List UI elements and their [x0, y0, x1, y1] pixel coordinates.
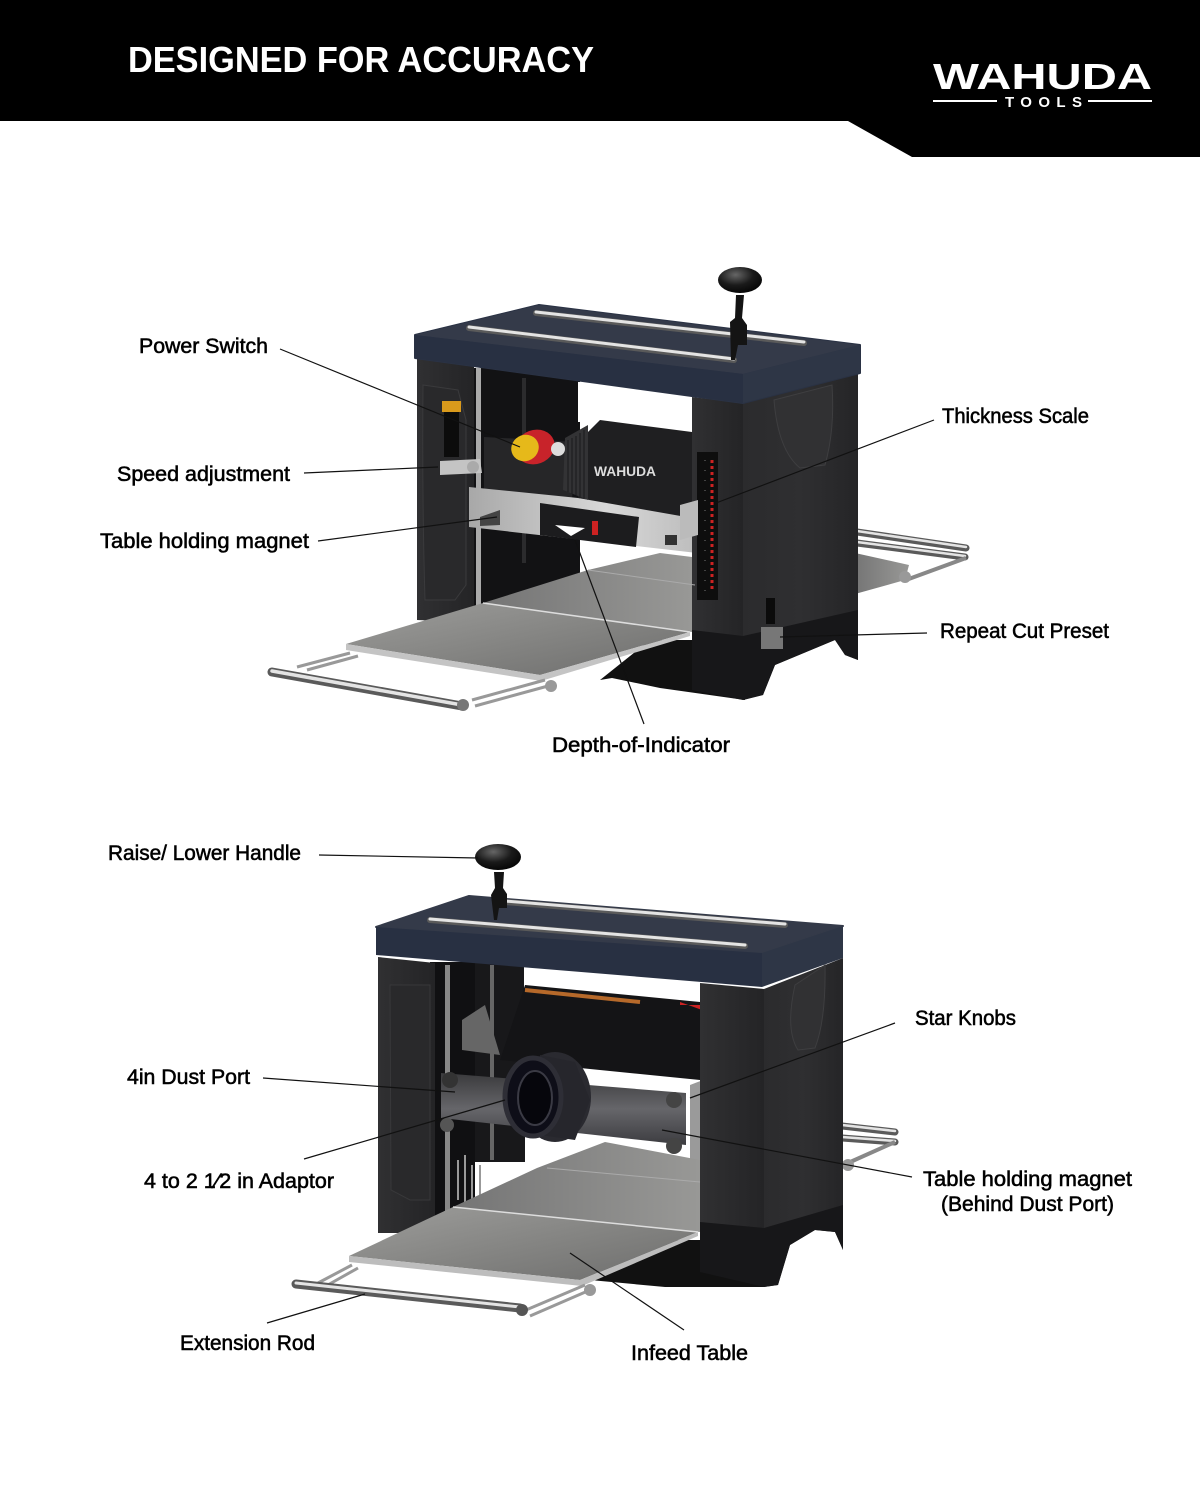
callout: Raise/ Lower Handle: Raise/ Lower Handle: [108, 842, 301, 865]
left leg: [378, 957, 435, 1233]
raise and lower handle: [475, 844, 521, 920]
lid: [376, 896, 843, 987]
rear extension rod: [842, 1125, 895, 1171]
infeed table: [349, 1142, 700, 1286]
callout: Thickness Scale: Thickness Scale: [942, 405, 1089, 428]
callout: Raise/ Lower Handle: [108, 842, 478, 865]
logo: Wahuda Tools: TOOLS: [1005, 94, 1082, 111]
callout: Table holding magnet (Behind Dust Port): [662, 1130, 1132, 1216]
left leg: [417, 358, 474, 622]
product photo: planer front view: [272, 267, 966, 711]
dust hood: [440, 1072, 703, 1165]
motor logo text: WAHUDA: [594, 463, 656, 479]
callout: Repeat Cut Preset: Repeat Cut Preset: [940, 620, 1109, 643]
right body: [692, 372, 858, 700]
logo: Wahuda Tools: [933, 56, 1152, 111]
top rails: [469, 312, 804, 360]
rear columns and white opening: [470, 368, 693, 613]
callout: Repeat Cut Preset: [780, 620, 1109, 643]
front extension rod: [296, 1265, 596, 1316]
callout: Extension Rod: [180, 1294, 365, 1355]
callout: Speed adjustment: Speed adjustment: [117, 463, 290, 486]
product photo: planer rear view: [296, 844, 895, 1316]
rear cavity: [430, 962, 706, 1232]
base under table: [590, 1240, 765, 1287]
callout: Table holding magnet (Behind Dust Port): (Behind Dust Port): [941, 1193, 1114, 1216]
callout: Infeed Table: Infeed Table: [631, 1342, 748, 1365]
callout: Thickness Scale: [716, 405, 1089, 503]
raise and lower handle: [718, 267, 762, 360]
callout: Star Knobs: [690, 1007, 1016, 1098]
rear extension table: [855, 531, 966, 594]
callout: Table holding magnet: [100, 517, 497, 553]
title: DESIGNED FOR ACCURACY: [128, 39, 594, 80]
callout: Extension Rod: Extension Rod: [180, 1332, 315, 1355]
depth indicator plate: [540, 503, 639, 547]
callout: 4 to 2 1/2 in Adaptor: 4 to 2 1⁄2 in Adaptor: [144, 1170, 334, 1193]
thickness scale: [680, 452, 718, 600]
callout: Speed adjustment: [117, 463, 438, 486]
base under table: [600, 640, 745, 700]
top rails: [430, 901, 785, 946]
callout: Depth-of-Indicator: [552, 540, 730, 757]
front extension rod: [272, 653, 557, 711]
carriage and motor: [440, 420, 697, 553]
callout: Power Switch: Power Switch: [139, 335, 268, 358]
4 inch dust port adaptor: [505, 1052, 591, 1142]
callout: 4 to 2 1/2 in Adaptor: [144, 1100, 505, 1193]
right body: [700, 958, 843, 1287]
callout: Depth-of-Indicator: Depth-of-Indicator: [552, 734, 730, 757]
callout: Table holding magnet (Behind Dust Port): Table holding magnet: [923, 1168, 1132, 1191]
callout: Infeed Table: [570, 1253, 748, 1365]
logo: Wahuda Tools: WAHUDA: [933, 56, 1152, 97]
front table: [346, 553, 695, 681]
lid: [415, 305, 860, 403]
icon: power switch: [506, 424, 565, 470]
callout: Power Switch: [139, 335, 520, 447]
callout: Table holding magnet: Table holding magnet: [100, 530, 309, 553]
callout: 4in Dust Port: 4in Dust Port: [127, 1066, 250, 1089]
header banner: [0, 0, 1200, 157]
callout: Star Knobs: Star Knobs: [915, 1007, 1016, 1030]
callout: 4in Dust Port: [127, 1066, 455, 1092]
